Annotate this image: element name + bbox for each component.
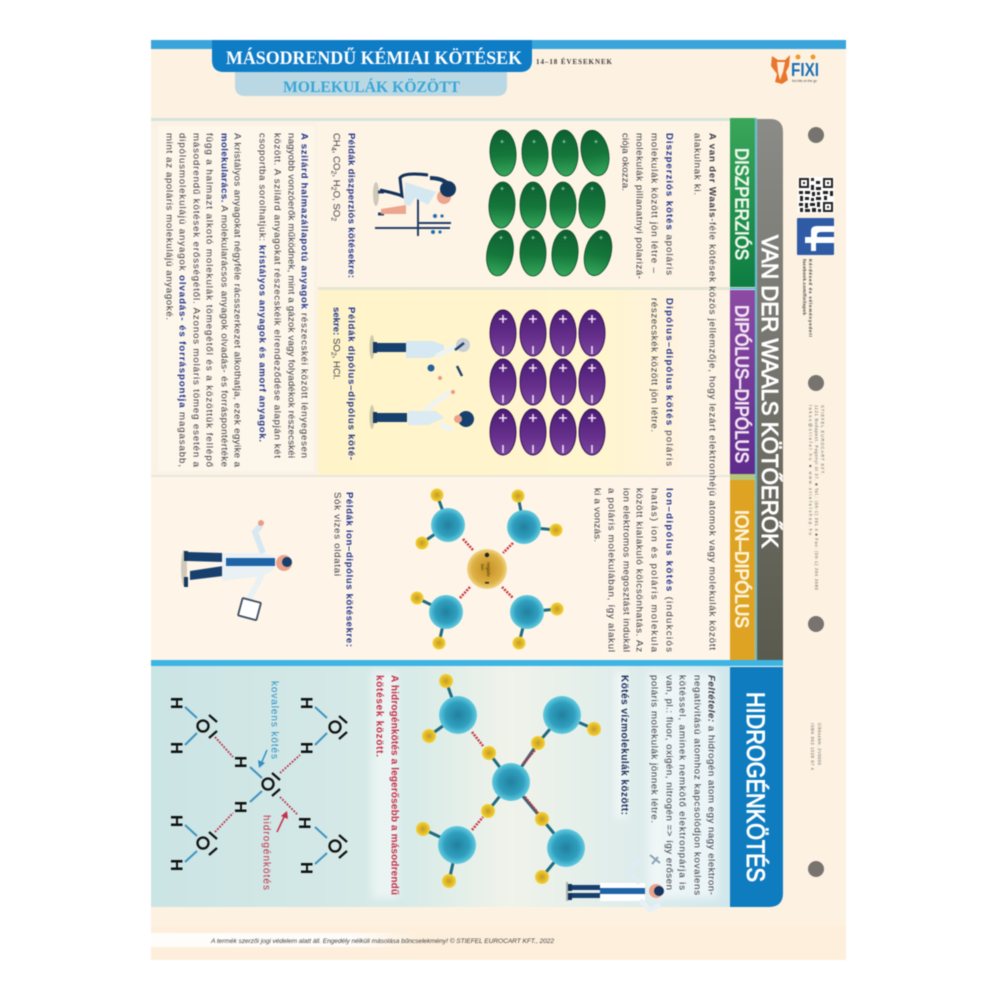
paragraph: solid-state substances: nagyobb vonzóerők működnek, mint a gázok vagy folyadékok részecskéi [286, 133, 296, 458]
icon: Facebook [797, 218, 834, 255]
text: ion-dipole bond: Ion–dipólus kötés (indukciós [664, 488, 674, 652]
panel: dipole-dipole [318, 290, 730, 476]
intro text [692, 133, 718, 650]
text: publisher: 1121 Budapest, Pagonyi út 37. ■ Tel.: (06-1) 391 4 ■ Fax: (06-1) 394 3680 [814, 405, 819, 591]
diagram: water Lewis structure: H [297, 697, 316, 709]
diagram: water Lewis structure: H [297, 742, 316, 754]
text: condition: Feltétele: a hidrogén atom egy nagy elektron- [706, 675, 716, 895]
panel: hydrogen bond [151, 666, 730, 910]
green partial charges: + [499, 235, 503, 242]
intro text: A van der Waals -féle kötések közös jellemzője, hogy lezárt elektronhéjú atomok vagy molekulák között [706, 133, 718, 650]
punch holes [808, 127, 824, 877]
age label: 14–18 ÉVESEKNEK [536, 58, 613, 66]
green partial charges [499, 139, 603, 242]
text: publisher: STIEFEL EUROCART KFT. [820, 405, 825, 475]
logo: Fixi fox: FIXI [791, 60, 819, 80]
diagram: water Lewis structure: H [297, 862, 316, 874]
label: hydrogen bond: hidrogénkötés [260, 815, 272, 890]
diagram: water molecules balls [416, 674, 601, 888]
tab: dispersion [730, 118, 755, 287]
text: dipole bond: részecskék között jön létre. [648, 298, 660, 432]
text: strongest secondary bond: A hidrogénkötés a legerősebb a másodrendű [388, 675, 400, 895]
panel: dispersion [318, 121, 730, 290]
diagram: ion with dipoles [410, 488, 564, 650]
header bar: Van der Waals: VAN DER WAALS KÖTŐERŐK [757, 235, 783, 548]
text: ion-dipole bond: a poláris molekulában, így alakul [606, 488, 616, 652]
examples: dipole [330, 307, 356, 460]
diagram: water Lewis structure: H [295, 817, 314, 829]
text: facebook follow: facebook.com/fixilapok [802, 259, 807, 315]
text: ion-dipole bond: ki a vonzás. [592, 488, 602, 542]
subtitle tab: MOLEKULÁK KÖZÖTT [283, 77, 460, 96]
paragraph: crystalline substances: dipólusmolekulájú anyagok olvadás- és forráspontja magasabb, [176, 133, 188, 467]
examples: dispersion: , CO [330, 151, 342, 170]
figure: two scientists [370, 335, 474, 430]
text: product codes: ISBN 963 1528 97 4 [810, 723, 815, 771]
paragraph: crystalline substances [164, 133, 242, 468]
diagram: water Lewis structure: H [167, 697, 186, 709]
paragraph: crystalline substances: mint az apoláris molekulájú anyagoké. [164, 133, 174, 320]
diagram: water Lewis structure [167, 697, 347, 874]
green partial charges: + [500, 186, 504, 193]
text: condition [648, 675, 716, 895]
paragraph: solid-state substances: csoportba sorolhatjuk: kristályos anyagok és amorf anyagok. [256, 133, 268, 442]
diagram: water Lewis structure: H [231, 801, 250, 813]
examples: dispersion: 2 [330, 217, 336, 221]
green partial charges: + [500, 139, 504, 146]
label: hydrogen bond [260, 811, 288, 890]
text: dipole bond: Dipólus–dipólus kötés poláris [664, 298, 674, 466]
text: water bond heading: Kötés vízmolekulák között: [618, 675, 630, 815]
text: strongest secondary bond: kötések között. [374, 675, 384, 757]
title tab: MÁSODRENDŰ KÉMIAI KÖTÉSEK [226, 47, 522, 69]
text: ion-dipole bond: hatás) ion és poláris molekula [648, 488, 660, 653]
diagram: green molecules [483, 128, 616, 278]
examples: dispersion [330, 133, 356, 278]
tab: ion-dipole [730, 480, 755, 660]
green partial charges: + [594, 139, 598, 146]
figure: scientist with model [566, 855, 664, 910]
tab: hydrogen bond [730, 667, 783, 907]
tab: dipole: DIPÓLUS–DIPÓLUS [732, 305, 752, 463]
paragraph: solid-state substances: A szilárd halmazállapotú anyagok részecskéi között lényegesen [298, 133, 310, 458]
panel top rule [151, 118, 730, 121]
green partial charges: + [599, 235, 603, 242]
header bar: Van der Waals [757, 119, 783, 660]
green partial charges: + [562, 139, 566, 146]
text: condition: van, pl.: fluor, oxigén, nitrogén => így erősen [664, 675, 674, 890]
text: dispersion bond: ciója okozza. [620, 133, 630, 191]
examples: dispersion: Példák diszperziós kötésekre: [346, 133, 356, 278]
green partial charges: + [563, 235, 567, 242]
cyan divider [151, 660, 783, 666]
label: covalent bond: kovalens kötés [268, 681, 280, 759]
paragraph: solid-state substances: között. A szilárd anyagokat részecskéik elrendeződése alapján két [272, 133, 282, 458]
green partial charges: + [561, 186, 565, 193]
examples: dispersion: CH [330, 133, 342, 147]
label: covalent bond [258, 681, 280, 768]
icon: QR code [798, 177, 834, 213]
examples: ion-dipole: Sók vizes oldatai [332, 492, 342, 576]
diagram: ion with dipoles: ion [480, 564, 485, 571]
paragraph: crystalline substances: A kristályos anyagokat négyféle rácsszerkezet alkothatja, ezek egyike a [232, 133, 242, 468]
text: product codes [810, 723, 822, 771]
examples: ion-dipole [332, 492, 354, 647]
tab: dispersion: DISZPERZIÓS [732, 148, 752, 260]
examples: ion-dipole: Példák ion–dipólus kötésekre: [344, 492, 354, 647]
text: dispersion bond: Diszperziós kötés apoláris [664, 133, 674, 275]
figure: scientist with clipboard [181, 520, 292, 620]
text: facebook follow [802, 259, 813, 337]
figure: scientist at lab bench [373, 174, 456, 236]
logo: Fixi fox [771, 54, 819, 84]
green partial charges: + [532, 139, 536, 146]
text: product codes: Cikkszám: 2V0006 [817, 723, 822, 766]
text: dispersion bond [620, 133, 674, 279]
text: ion-dipole bond: ion elektromos megosztást indukál [620, 488, 632, 652]
examples: dipole: sekre: SO [330, 307, 342, 352]
examples: dispersion: 2 [330, 187, 336, 191]
text: publisher [808, 405, 825, 591]
examples: dispersion: O, SO [330, 191, 342, 217]
tab: ion-dipole: ION–DIPÓLUS [732, 510, 752, 628]
subtitle tab [235, 70, 507, 96]
examples: dispersion: 2 [330, 170, 336, 174]
text: dispersion bond: molekulák között jön létre – [648, 133, 660, 274]
text: condition: negativitású atomhoz kapcsolódjon kovalens [692, 675, 702, 895]
title tab [212, 40, 532, 72]
examples: dipole: , HCl. [330, 356, 342, 380]
text: ion-dipole bond [592, 488, 674, 653]
paragraph: crystalline substances: másodrendű kötések erősségétől. Azonos moláris tömeg esetén a [190, 133, 202, 468]
diagram: purple dipoles [490, 310, 605, 455]
diagram: water Lewis structure: H [167, 742, 186, 754]
examples: dipole: Példák dipólus–dipólus köté- [346, 307, 356, 460]
diagram: water Lewis structure: H [167, 859, 186, 871]
bottom note [151, 933, 554, 947]
panel: ion-dipole [151, 475, 730, 660]
logo: Fixi fox: fun bits on the go [792, 79, 817, 83]
diagram: water Lewis structure: H [231, 756, 250, 768]
panel: solid-state text column [151, 121, 318, 475]
intro text: alakulnak ki. [692, 133, 702, 195]
text: condition: poláris molekulák jönnek létre. [648, 675, 660, 823]
text: facebook follow: Kérdésed és véleményedet! [808, 259, 813, 337]
text: dispersion bond: molekulák pillanatnyi polarizá- [634, 133, 644, 279]
diagram: ion with dipoles: negatív [486, 562, 491, 578]
text: ion-dipole bond: között kialakuló kölcsönhatás. Az [634, 488, 644, 652]
text: publisher: lakos@stiefel.hu ■ www.stiefelshop.hu [808, 405, 813, 536]
text: dipole bond [648, 298, 674, 466]
text: strongest secondary bond [374, 675, 400, 895]
green partial charges: + [531, 186, 535, 193]
paragraph: crystalline substances: molekularács. A molekularácsos anyagok olvadás- és forráspontértéke [218, 133, 230, 467]
green partial charges: + [531, 235, 535, 242]
background sheet [151, 40, 846, 960]
paragraph: solid-state substances [256, 133, 310, 458]
tab dividers [730, 118, 756, 660]
examples: dispersion: 4 [330, 147, 336, 151]
examples: dipole: 2 [330, 352, 336, 356]
green partial charges: + [590, 186, 594, 193]
text: condition: kötéssel, aminek nemkötő elektronpárja is [676, 675, 688, 890]
tab: hydrogen bond: HIDROGÉNKÖTÉS [741, 692, 770, 882]
header [151, 40, 846, 96]
purple charges [499, 315, 596, 453]
diagram: water Lewis structure: H [167, 815, 186, 827]
paragraph: crystalline substances: függ a halmazt alkotó molekulák tömegétől és a közöttük fellépő [204, 133, 214, 467]
examples: dispersion: , H [330, 174, 342, 187]
bottom note: A termék szerzői jogi védelem alatt áll. Engedély nélküli másolása bűncselekmény! © STIEFEL EUROCART KFT., 2022 [210, 937, 554, 945]
